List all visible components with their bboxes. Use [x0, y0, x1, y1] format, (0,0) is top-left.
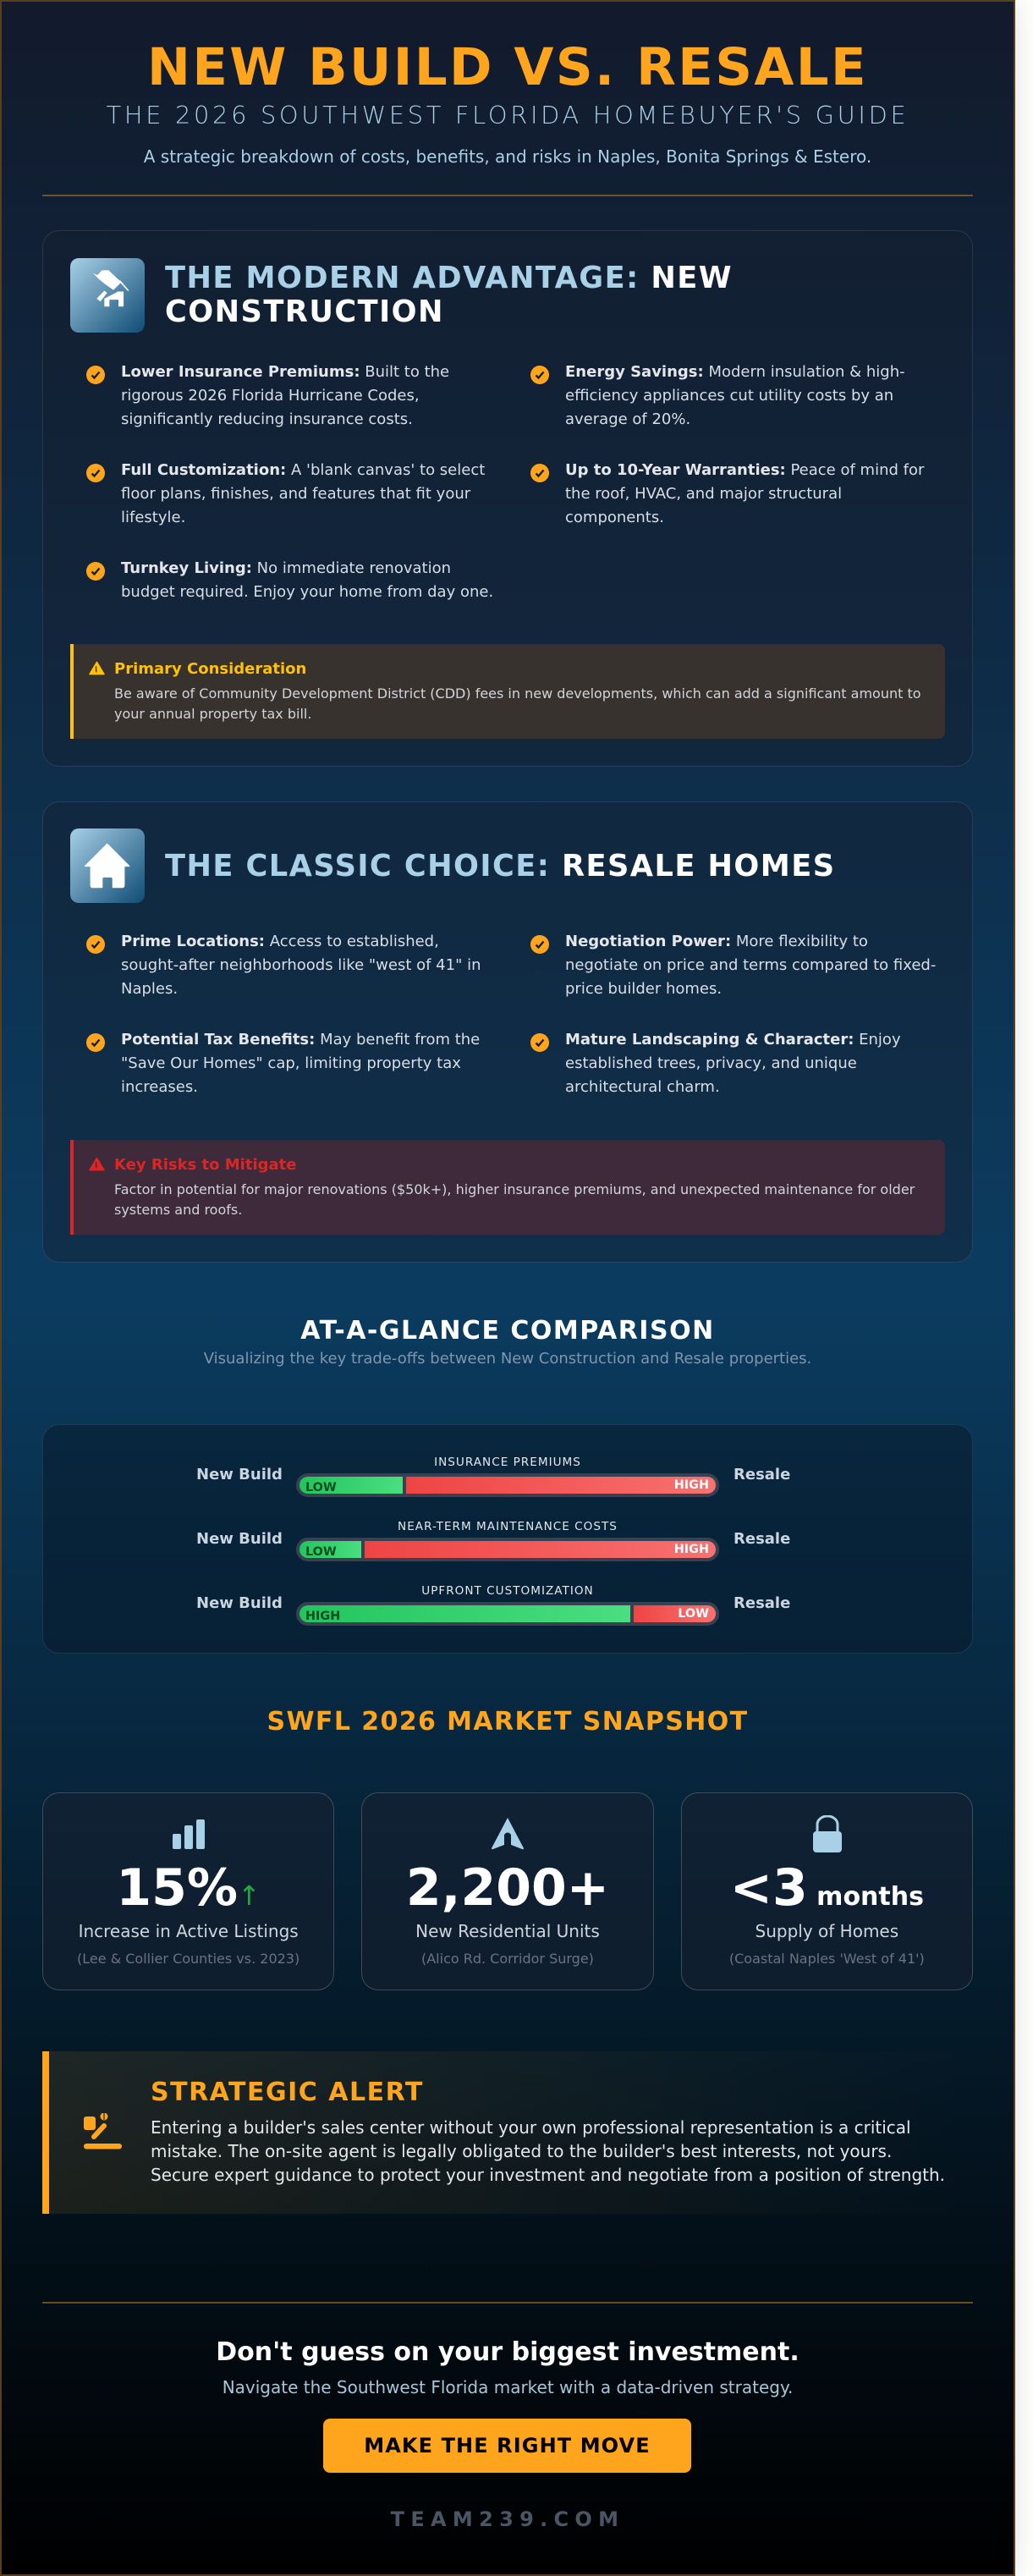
benefit: mature landscaping: established trees, privacy, and unique — [565, 1054, 857, 1072]
benefit: negotiation power: negotiate on price and terms compared to fixed- — [565, 956, 936, 974]
tagline: A strategic breakdown of costs, benefits, and risks in Naples, Bonita Springs & Estero. — [144, 146, 871, 167]
chart row: insurance premiums — [196, 1456, 790, 1497]
alert text: mistake. The on-site agent is legally obligated to the builder's best interests, not yours. — [151, 2141, 892, 2161]
benefit: energy savings: average of 20%. — [565, 410, 690, 428]
benefit: energy savings — [530, 363, 905, 428]
alert text — [151, 2117, 945, 2185]
benefit: warranties — [530, 461, 924, 526]
chart row: maintenance costs: HIGH — [674, 1543, 709, 1556]
benefit: prime locations: Prime Locations: Access to established, — [121, 933, 439, 950]
subheading: comparison: Visualizing the key trade-offs between New Construction and Resale properties. — [204, 1350, 811, 1368]
heading: modern advantage: CONSTRUCTION — [165, 294, 444, 329]
chart row: upfront customization: LOW — [678, 1607, 709, 1621]
icon: house — [70, 828, 145, 903]
button — [323, 2419, 691, 2473]
benefit: potential tax benefits: Potential Tax Benefits: May benefit from the — [121, 1031, 480, 1049]
stat card: active listings: Increase in Active Listings — [79, 1921, 299, 1941]
callout: primary consideration: your annual property tax bill. — [114, 706, 311, 722]
chart row: upfront customization: Resale — [734, 1594, 790, 1612]
title: NEW BUILD VS. RESALE — [147, 38, 868, 97]
benefit: full customization: Full Customization: A 'blank canvas' to select — [121, 461, 485, 479]
stat card: supply of homes: (Coastal Naples 'West of 41') — [729, 1951, 925, 1967]
chart row: maintenance costs — [196, 1520, 790, 1561]
stat card: supply of homes — [681, 1792, 973, 1990]
chart row: maintenance costs: LOW — [305, 1545, 337, 1559]
callout: primary consideration: Primary Consideration — [114, 660, 306, 678]
icon: bar chart — [173, 1819, 205, 1849]
stat card: residential units: (Alico Rd. Corridor Surge) — [421, 1951, 594, 1967]
icon: padlock — [813, 1815, 842, 1852]
benefit: mature landscaping: architectural charm. — [565, 1078, 720, 1096]
button: MAKE THE RIGHT MOVE — [364, 2434, 651, 2458]
chart row: maintenance costs: Resale — [734, 1530, 790, 1548]
stat card: active listings: 15%↑ — [116, 1858, 261, 1918]
benefit: potential tax benefits: increases. — [121, 1078, 198, 1096]
stat card: supply of homes: <3 months — [730, 1858, 924, 1918]
alert text: Secure expert guidance to protect your investment and negotiate from a position of strength. — [151, 2165, 945, 2185]
heading: at-a-glance comparison: AT-A-GLANCE COMPARISON — [300, 1316, 715, 1346]
icon: navigation arrow — [492, 1818, 524, 1850]
chart row: upfront customization: HIGH — [305, 1610, 340, 1623]
subtitle: THE 2026 SOUTHWEST FLORIDA HOMEBUYER'S GUIDE — [107, 101, 909, 129]
alert heading: STRATEGIC ALERT — [151, 2078, 424, 2107]
callout: strategic alert — [42, 2051, 973, 2214]
stat card: active listings: (Lee & Collier Counties vs. 2023) — [77, 1951, 299, 1967]
benefit: negotiation power: Negotiation Power: More flexibility to — [565, 933, 868, 950]
footer call to action — [216, 2337, 799, 2531]
heading: classic choice: THE CLASSIC CHOICE: RESALE HOMES — [165, 849, 836, 883]
callout: primary consideration: Be aware of Community Development District (CDD) fees in new developments, which can add a significant amount to — [114, 685, 921, 702]
benefit: lower insurance premiums: significantly reducing insurance costs. — [121, 410, 413, 428]
benefit: energy savings: efficiency appliances cut utility costs by an — [565, 387, 893, 405]
callout: key risks: Factor in potential for major renovations ($50k+), higher insurance premiums, and unexpected maintenance for older — [114, 1181, 915, 1197]
stat card: supply of homes: Supply of Homes — [756, 1921, 898, 1941]
heading: market snapshot: SWFL 2026 MARKET SNAPSHOT — [266, 1707, 749, 1737]
cta subheading: Navigate the Southwest Florida market with a data-driven strategy. — [223, 2377, 793, 2397]
chart row: maintenance costs: New Build — [196, 1530, 283, 1548]
panel: comparison chart — [42, 1424, 973, 1654]
benefit: lower insurance premiums — [86, 363, 449, 428]
icon: hammer and house — [70, 258, 145, 333]
chart row: insurance premiums: LOW — [305, 1481, 337, 1494]
chart row: upfront customization: New Build — [196, 1594, 283, 1612]
benefit: mature landscaping: Mature Landscaping & Character: Enjoy — [565, 1031, 901, 1049]
icon: gavel — [84, 2113, 122, 2149]
chart row: insurance premiums: Resale — [734, 1466, 790, 1483]
header — [107, 38, 909, 167]
chart row: maintenance costs: NEAR-TERM MAINTENANCE COSTS — [398, 1520, 618, 1533]
benefit: potential tax benefits: "Save Our Homes" cap, limiting property tax — [121, 1054, 461, 1072]
stat card: residential units: New Residential Units — [415, 1921, 600, 1941]
benefit: prime locations: sought-after neighborhoods like "west of 41" in — [121, 956, 481, 974]
benefit: full customization: floor plans, finishes, and features that fit your — [121, 485, 470, 503]
benefit: negotiation power: price builder homes. — [565, 980, 722, 998]
benefit: warranties: Up to 10-Year Warranties: Peace of mind for — [565, 461, 924, 479]
benefit: warranties: the roof, HVAC, and major structural — [565, 485, 842, 503]
benefit: lower insurance premiums: Lower Insurance Premiums: Built to the — [121, 363, 449, 381]
panel: resale homes — [42, 801, 973, 1263]
chart row: upfront customization: UPFRONT CUSTOMIZATION — [421, 1584, 594, 1598]
callout: primary consideration — [70, 644, 945, 739]
callout: key risks: systems and roofs. — [114, 1202, 242, 1218]
chart row: insurance premiums: New Build — [196, 1466, 283, 1483]
benefit: prime locations: Naples. — [121, 980, 178, 998]
chart row: upfront customization — [196, 1584, 790, 1626]
heading: modern advantage — [165, 261, 733, 329]
benefit: turnkey living: budget required. Enjoy your home from day one. — [121, 583, 493, 601]
chart row: insurance premiums: HIGH — [674, 1478, 709, 1492]
benefit: negotiation power — [530, 933, 936, 998]
benefit: full customization — [86, 461, 485, 526]
benefit: potential tax benefits — [86, 1031, 480, 1096]
cta heading: Don't guess on your biggest investment. — [216, 2337, 799, 2367]
alert text: Entering a builder's sales center without your own professional representation is a critical — [151, 2117, 911, 2138]
website: TEAM239.COM — [391, 2507, 624, 2531]
benefit: turnkey living — [86, 559, 493, 601]
stat card: residential units: 2,200+ — [406, 1858, 609, 1918]
heading: modern advantage: THE MODERN ADVANTAGE: NEW — [165, 261, 733, 295]
benefit: full customization: lifestyle. — [121, 509, 185, 526]
callout: key risks — [70, 1140, 945, 1235]
benefit: lower insurance premiums: rigorous 2026 Florida Hurricane Codes, — [121, 387, 420, 405]
callout: key risks: Key Risks to Mitigate — [114, 1156, 296, 1174]
chart row: insurance premiums: INSURANCE PREMIUMS — [434, 1456, 581, 1469]
benefit: warranties: components. — [565, 509, 664, 526]
stat card: residential units — [361, 1792, 654, 1990]
benefit: prime locations — [86, 933, 481, 998]
benefit: turnkey living: Turnkey Living: No immediate renovation — [121, 559, 451, 577]
panel: new construction — [42, 230, 973, 767]
stat card: active listings — [42, 1792, 334, 1990]
benefit: energy savings: Energy Savings: Modern insulation & high- — [565, 363, 905, 381]
benefit: mature landscaping — [530, 1031, 901, 1096]
